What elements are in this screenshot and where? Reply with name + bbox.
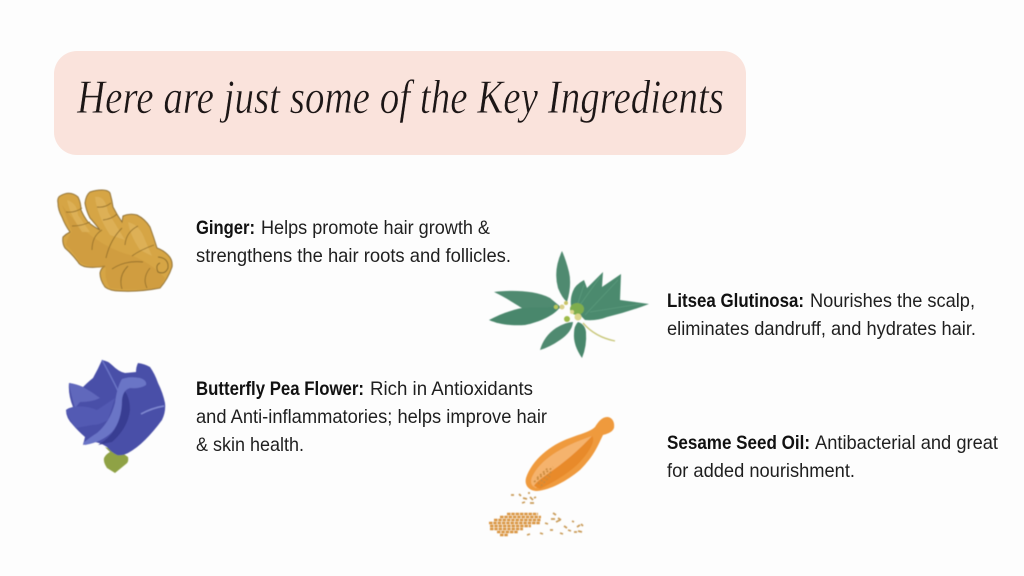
icon: scoop with sesame seeds <box>489 417 614 535</box>
icon: litsea glutinosa leaves <box>489 251 649 358</box>
text: litsea glutinosa: Litsea Glutinosa: <box>667 290 804 312</box>
text: butterfly pea flower <box>196 378 547 456</box>
text: ginger: Ginger: <box>196 217 255 239</box>
text: butterfly pea flower: Rich in Antioxidants <box>370 378 533 400</box>
text: litsea glutinosa <box>667 290 976 340</box>
icon: ginger root <box>58 190 172 291</box>
text: sesame seed oil: Sesame Seed Oil: <box>667 432 810 454</box>
text: litsea glutinosa: Nourishes the scalp, <box>810 290 975 312</box>
text: sesame seed oil: Antibacterial and great <box>815 432 999 454</box>
text: sesame seed oil <box>667 432 999 482</box>
text: butterfly pea flower: Butterfly Pea Flower: <box>196 378 364 400</box>
text: ginger: Helps promote hair growth & <box>261 217 490 239</box>
seed pile <box>489 514 541 535</box>
text: butterfly pea flower: & skin health. <box>196 434 304 456</box>
text: butterfly pea flower: and Anti-inflammatories; helps improve hair <box>196 406 547 428</box>
title banner <box>54 51 746 155</box>
text: sesame seed oil: for added nourishment. <box>667 460 855 482</box>
text: ginger <box>196 217 511 267</box>
title: Here are just some of the Key Ingredients <box>76 71 724 124</box>
text: ginger: strengthens the hair roots and follicles. <box>196 245 511 267</box>
icon: butterfly pea flower <box>66 360 165 473</box>
text: litsea glutinosa: eliminates dandruff, and hydrates hair. <box>667 318 976 340</box>
